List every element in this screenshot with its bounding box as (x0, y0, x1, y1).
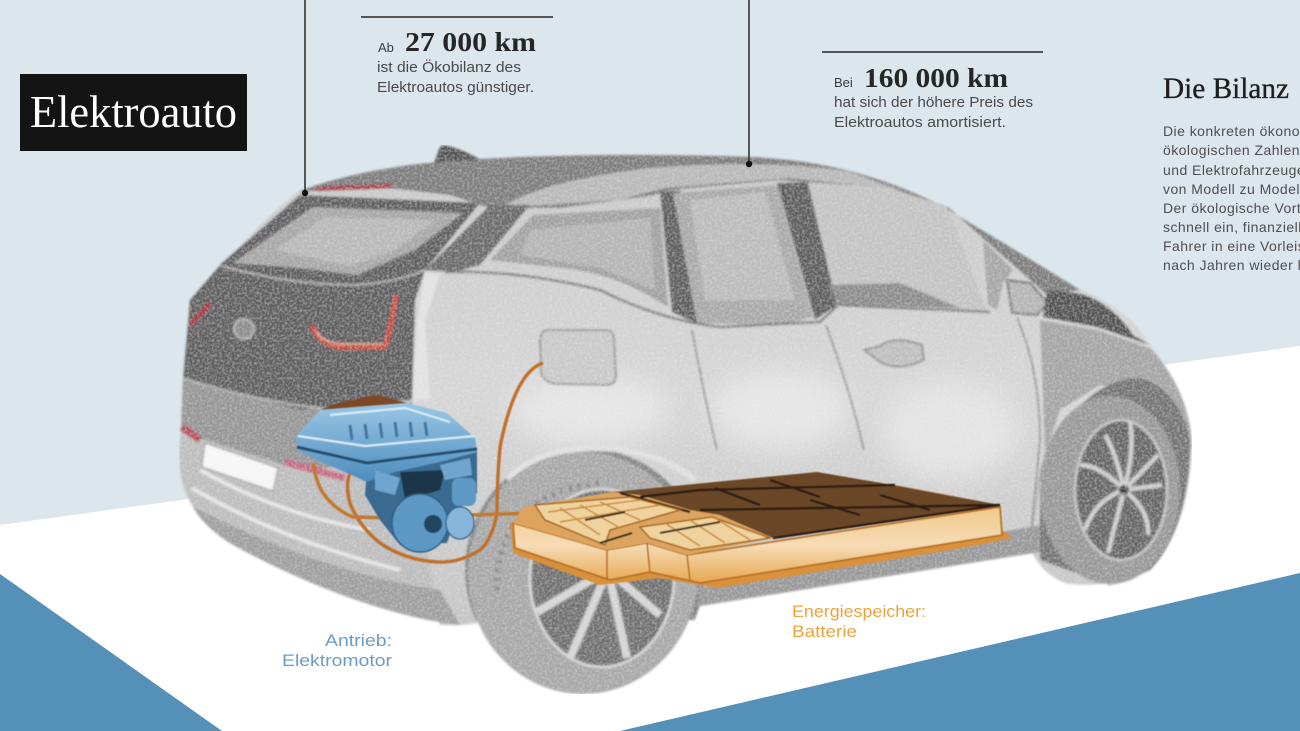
spokes near (537, 570, 660, 658)
arch light edge (508, 448, 695, 480)
rear window lighter patch (275, 217, 435, 266)
motor: main pulley (392, 494, 448, 552)
pointer line: rear of car (302, 0, 308, 196)
door handle (864, 340, 924, 367)
label: Antrieb Elektromotor (282, 631, 392, 670)
sill and underbody shadow (697, 525, 1040, 606)
background: blue corner left (0, 574, 222, 731)
belt line (445, 272, 990, 327)
battery: cell grid middle (665, 518, 750, 546)
motor: side block (452, 478, 476, 506)
reflector (182, 427, 200, 440)
motor: dark flange (297, 447, 477, 463)
small quarter window (983, 240, 1013, 310)
side window 3 lower shadow (828, 283, 960, 308)
battery: side face (513, 507, 1002, 583)
illustration: electric motor with cables (295, 363, 543, 562)
motor: shaft (424, 515, 442, 533)
rim front (1075, 420, 1167, 560)
roof and spoiler (298, 155, 1080, 295)
rim near (530, 489, 674, 667)
charging flap (540, 330, 616, 385)
callout: 160 000 km: Elektroautos amortisiert. (834, 115, 1006, 131)
label: Energiespeicher Batterie (792, 602, 926, 641)
motor: cover ribs (350, 422, 427, 440)
body shading front (1030, 320, 1192, 545)
callout: 27 000 km: 27 000 km (405, 27, 537, 57)
callout: 160 000 km: hat sich der höhere Preis des (834, 95, 1033, 111)
car body shell (179, 155, 1192, 625)
label: Antrieb Elektromotor: Antrieb: (325, 631, 392, 650)
battery: bottom flange (510, 523, 1012, 588)
front hub (1119, 485, 1129, 495)
lower hatch mid grey (181, 378, 412, 470)
callout: 160 000 km: 160 000 km (864, 63, 1009, 93)
title: Elektroauto (20, 74, 247, 151)
wheel arch near (464, 450, 704, 622)
tail light right (312, 295, 396, 347)
cable: charging port to motor (348, 363, 543, 562)
heading: Die Bilanz: Die Bilanz (1163, 72, 1289, 105)
battery: exposed cells left (535, 497, 680, 545)
tail light right centre (316, 332, 383, 344)
C pillar dark (425, 205, 530, 272)
bmw emblem (234, 319, 254, 339)
illustration: car (179, 145, 1192, 694)
shark fin antenna (434, 145, 486, 163)
hood dark (1043, 290, 1150, 345)
battery: dark cover panels (613, 472, 1000, 538)
rear bumper (180, 432, 460, 625)
callout: 27 000 km: Elektroautos günstiger. (377, 80, 534, 96)
rear reflector right (284, 462, 345, 478)
motor: housing (295, 403, 477, 482)
side window 1 (490, 208, 668, 307)
tyre near (468, 452, 698, 694)
rear hatch dark panel (183, 195, 480, 410)
battery: top face (513, 472, 1000, 555)
motor: cover ridge (298, 408, 475, 446)
rear window (233, 207, 463, 275)
cable: motor to battery (313, 463, 535, 518)
motor: engine details (400, 470, 445, 500)
battery: cell grid left (548, 500, 660, 535)
motor: upper parts (375, 458, 472, 495)
battery: corner post (607, 543, 690, 580)
label: Energiespeicher Batterie: Energiespeicher: (792, 602, 926, 621)
wheel arch front (1040, 378, 1190, 585)
pillar B dark (660, 190, 700, 325)
motor: gearbox body (365, 448, 477, 545)
door lines (692, 318, 1040, 545)
background: white floor (0, 346, 1300, 731)
mirror (1007, 280, 1048, 315)
text block: Bilanz body text (1163, 123, 1300, 273)
callout: 160 000 km: Bei (834, 75, 853, 90)
motor: brown top (322, 396, 407, 415)
hatch line (222, 266, 430, 285)
high brake light (316, 186, 392, 189)
pointer line: roof of car (746, 0, 752, 167)
illustration: battery pack (510, 472, 1012, 588)
spokes front (1080, 422, 1162, 553)
label: Antrieb Elektromotor: Elektromotor (282, 651, 392, 670)
bumper lower band (193, 507, 460, 625)
callout: 27 000 km: Ab (378, 40, 394, 55)
C pillar light strip (413, 272, 440, 400)
hatch trim (183, 378, 380, 412)
battery: exposed cells middle (640, 517, 770, 550)
callout: 27 000 km: ist die Ökobilanz des (377, 58, 521, 76)
tyre tread near (497, 483, 600, 590)
label: Energiespeicher Batterie: Batterie (792, 622, 857, 641)
battery: dark gap (585, 512, 720, 543)
side window 2 (673, 185, 813, 325)
side window 3 (808, 183, 987, 310)
tail light left (190, 303, 210, 325)
background: blue band right (620, 573, 1300, 731)
bumper highlights (192, 470, 400, 570)
side window 2 light (690, 192, 795, 300)
side window 1 light (520, 218, 655, 290)
battery: cover seams (620, 480, 1000, 538)
body light patches (510, 370, 1020, 480)
callout: 160 000 km (822, 52, 1043, 131)
roof highlight (500, 164, 900, 208)
callout: 27 000 km (361, 17, 553, 96)
tyre front (1040, 396, 1180, 584)
title: Elektroauto: Elektroauto (30, 86, 237, 137)
licence plate (202, 443, 278, 491)
motor: small pulley (446, 507, 474, 539)
pillar dark (777, 182, 837, 320)
